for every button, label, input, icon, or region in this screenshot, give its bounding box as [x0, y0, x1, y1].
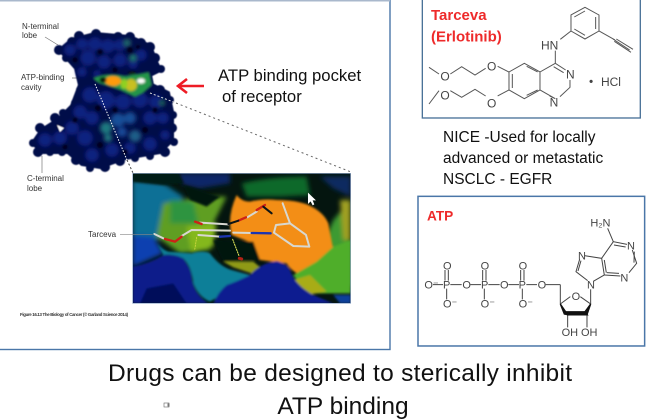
chemical structure: ATP: O — [462, 279, 471, 291]
drug stick model — [154, 203, 309, 259]
panel: ATP structure — [418, 196, 645, 346]
chemical structure: ATP: O — [443, 260, 452, 272]
heading: ATP binding pocket of receptor — [218, 66, 362, 106]
heading: ATP binding pocket of receptor: of receptor — [222, 87, 302, 106]
chemical structure: erlotinib: O — [440, 70, 450, 84]
text block: NICE indication: NSCLC - EGFR — [443, 171, 552, 188]
label: ATP-binding cavity: ATP-binding — [21, 73, 64, 82]
icon: mouse pointer — [308, 193, 316, 205]
label: ATP-binding cavity — [21, 73, 98, 92]
heading: Tarceva (Erlotinib) — [431, 7, 502, 45]
chemical structure: ATP: OH — [581, 327, 598, 339]
chemical structure: erlotinib: O — [487, 60, 496, 74]
chemical structure: ATP: O⁻ — [481, 298, 495, 310]
chemical structure: ATP: O — [538, 279, 547, 291]
arrow: points to binding pocket — [178, 79, 204, 93]
chemical structure: erlotinib — [429, 7, 633, 110]
heading: ATP: ATP — [427, 208, 453, 223]
label: ATP-binding cavity: cavity — [21, 83, 41, 92]
text block: NICE indication: NICE -Used for locally — [443, 129, 596, 146]
chemical structure: ATP: N — [578, 250, 586, 262]
chemical structure: erlotinib: HN — [541, 38, 558, 52]
chemical structure: ATP: N — [627, 240, 635, 252]
chemical structure: erlotinib: N — [566, 68, 575, 82]
heading: Tarceva (Erlotinib): Tarceva — [431, 7, 487, 24]
chemical structure: erlotinib: O — [440, 88, 450, 102]
chemical structure: erlotinib: N — [550, 96, 558, 110]
chemical structure: ATP: O⁻ — [443, 298, 458, 310]
chemical structure: ATP — [424, 218, 637, 339]
text block: NICE indication: advanced or metastatic — [443, 150, 604, 167]
caption: figure credit: Figure 16.13 The Biology of Cancer (© Garland Science 2014) — [20, 312, 129, 317]
panel: protein structure figure — [0, 0, 390, 350]
chemical structure: ATP: O — [481, 260, 490, 272]
chemical structure: ATP: O — [500, 279, 509, 291]
inset: close-up of drug in binding pocket — [120, 173, 351, 303]
heading: ATP binding pocket of receptor: ATP binding pocket — [218, 66, 362, 85]
label: C-terminal lobe: C-terminal — [27, 174, 64, 183]
chemical structure: ATP: O — [519, 260, 528, 272]
text block: NICE indication — [443, 129, 604, 188]
main caption: Drugs can be designed to sterically inhibit — [108, 360, 572, 387]
chemical structure: erlotinib: O — [487, 96, 496, 110]
chemical structure: ATP: O⁻ — [519, 298, 533, 310]
main caption — [108, 360, 572, 420]
chemical structure: ATP: P — [443, 279, 450, 291]
protein surface model — [29, 29, 178, 172]
label: C-terminal lobe — [27, 156, 64, 193]
chemical structure: ATP: O — [572, 291, 581, 303]
label: C-terminal lobe: lobe — [27, 184, 43, 193]
label: N-terminal lobe: N-terminal — [22, 22, 59, 31]
dashed zoom guide lines — [95, 84, 351, 173]
chemical structure: erlotinib: • — [589, 74, 593, 88]
binding cavity colours — [93, 72, 152, 97]
chemical structure: ATP: P — [519, 279, 526, 291]
small slide icon — [164, 403, 170, 407]
chemical structure: ATP: OH — [562, 327, 578, 339]
chemical structure: ATP: O⁻ — [424, 279, 439, 291]
chemical structure: erlotinib: HCl — [601, 75, 621, 89]
chemical structure: ATP: P — [481, 279, 488, 291]
chemical structure: ATP: N — [620, 272, 628, 284]
label: Tarceva: Tarceva — [88, 230, 117, 239]
label: N-terminal lobe: lobe — [22, 31, 38, 40]
chemical structure: ATP: N — [587, 280, 595, 292]
panel: Tarceva (Erlotinib) structure — [422, 0, 640, 118]
main caption: ATP binding — [277, 393, 409, 420]
heading: Tarceva (Erlotinib): (Erlotinib) — [431, 28, 502, 45]
chemical structure: ATP: H₂N — [590, 218, 611, 230]
label: N-terminal lobe — [22, 22, 59, 45]
